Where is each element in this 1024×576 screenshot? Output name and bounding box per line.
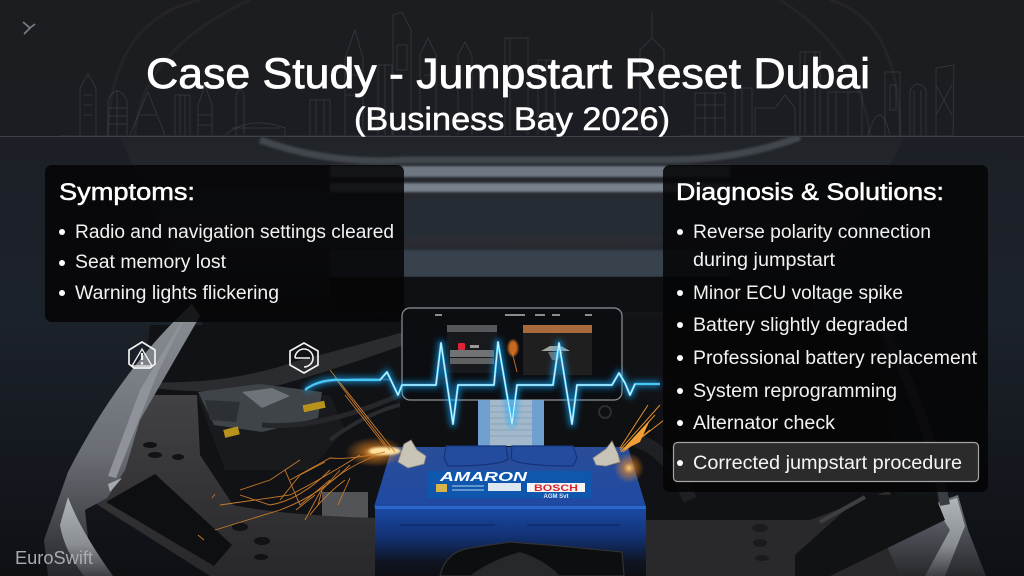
item: reverse polarity: Reverse polarity connection xyxy=(693,222,931,243)
battery label xyxy=(428,469,591,500)
diagnostic screen xyxy=(402,308,622,400)
right terminal xyxy=(593,441,620,466)
left terminal xyxy=(398,440,426,468)
symptoms heading: Symptoms: xyxy=(59,179,195,206)
engine cover silhouette xyxy=(440,542,624,576)
item: battery degraded: Battery slightly degraded xyxy=(693,315,908,336)
right car body xyxy=(752,320,986,576)
icon: corner logo mark xyxy=(23,22,35,34)
highlighted item: corrected procedure xyxy=(674,442,978,482)
battery label: AMARON xyxy=(439,469,528,484)
item: reverse polarity: during jumpstart xyxy=(693,250,836,271)
battery label: BOSCH xyxy=(534,483,578,493)
symptom: radio and navigation: Radio and navigation settings cleared xyxy=(75,222,394,243)
screen window: alert xyxy=(447,325,497,373)
item: reverse polarity xyxy=(677,222,931,271)
battery top xyxy=(374,447,646,507)
title: Case Study - Jumpstart Reset Dubai xyxy=(146,50,870,98)
sparks: right terminal xyxy=(614,405,664,483)
ECG heartbeat line xyxy=(305,342,660,424)
diagnosis heading: Diagnosis & Solutions: xyxy=(676,179,944,206)
item: alternator check: Alternator check xyxy=(693,413,836,434)
sparks: left terminal xyxy=(198,370,405,540)
right inner plastic panel xyxy=(640,490,900,576)
battery vent caps xyxy=(444,446,577,466)
screen window: component view xyxy=(523,325,592,375)
left car body and strut xyxy=(44,304,270,576)
battery front xyxy=(375,508,646,576)
item: battery replacement: Professional battery replacement xyxy=(693,348,978,369)
item: ECU voltage spike: Minor ECU voltage spike xyxy=(693,283,903,304)
panel: diagnosis and solutions xyxy=(663,165,988,492)
icon: engine hexagon xyxy=(290,343,318,373)
engine bay xyxy=(130,325,900,526)
symptom: seat memory: Seat memory lost xyxy=(75,252,227,273)
battery xyxy=(374,440,646,576)
symptom: warning lights: Warning lights flickering xyxy=(75,283,279,304)
raised hood underside xyxy=(120,137,905,330)
item: system reprogramming: System reprogramming xyxy=(693,381,897,402)
header divider xyxy=(0,136,1024,137)
left inner plastic panel xyxy=(90,395,377,576)
watermark: EuroSwift xyxy=(15,548,93,568)
icon: warning hexagon xyxy=(129,342,155,368)
highlighted item: corrected procedure: Corrected jumpstart procedure xyxy=(693,453,962,474)
skyline line art xyxy=(60,12,955,136)
subtitle: (Business Bay 2026) xyxy=(354,101,670,137)
panel: symptoms xyxy=(45,165,404,322)
blue ribbon connector xyxy=(478,400,544,446)
header overlay with skyline xyxy=(0,0,1024,136)
battery label: AGM Svt xyxy=(543,494,569,500)
